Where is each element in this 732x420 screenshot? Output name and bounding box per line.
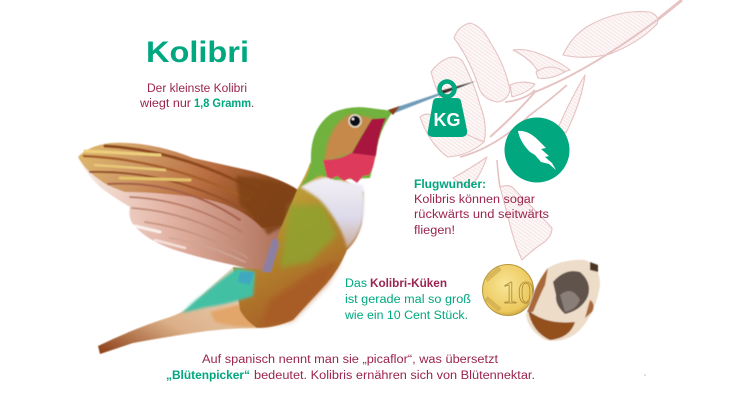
icon: 10 cent coin: 10 [502, 274, 534, 310]
red throat [323, 153, 375, 183]
text block: picaflor: bedeutet. Kolibris ernähren sich von Blütennektar. [254, 370, 535, 382]
illustration: flower branch [420, 0, 682, 260]
text block: picaflor: „Blütenpicker“ [166, 370, 250, 382]
icon: kg weight [428, 82, 467, 137]
text block: smallest hummingbird: 1,8 Gramm [194, 98, 251, 110]
wing base [262, 238, 279, 272]
text block: picaflor [166, 354, 535, 382]
text block: smallest hummingbird: Der kleinste Kolibri [147, 83, 247, 95]
text block: smallest hummingbird [139, 83, 254, 110]
text block: flight wonder [414, 179, 549, 237]
tail [98, 267, 260, 354]
beak [388, 81, 476, 114]
body [233, 163, 364, 328]
text block: chick size: ist gerade mal so groß [345, 294, 471, 306]
green back patches [280, 205, 337, 268]
icon: 10 cent coin [482, 264, 534, 316]
text block: picaflor: Auf spanisch nennt man sie „picaflor“, was übersetzt [202, 354, 499, 366]
text block: chick size: wie ein 10 Cent Stück. [344, 310, 468, 322]
hummingbird photo illustration [78, 81, 476, 354]
turquoise tail coverts [182, 268, 255, 313]
icon: kg weight: KG [434, 110, 460, 130]
wing [78, 143, 298, 272]
text block: flight wonder: Kolibris können sogar [414, 194, 535, 206]
head [300, 107, 393, 187]
icon: feather [504, 118, 570, 182]
text block: flight wonder: Flugwunder: [414, 179, 486, 191]
title: Kolibri [146, 36, 249, 69]
text block: flight wonder: fliegen! [414, 225, 455, 237]
text block: chick size: Das [345, 278, 367, 290]
text block: chick size [344, 278, 471, 322]
text block: flight wonder: rückwärts und seitwärts [414, 209, 549, 221]
belly [300, 177, 364, 248]
text block: smallest hummingbird: . [251, 98, 254, 110]
text block: smallest hummingbird: wiegt nur [139, 98, 191, 110]
text block: chick size: Kolibri-Küken [370, 278, 447, 290]
eye [349, 115, 361, 127]
nest [526, 260, 600, 341]
